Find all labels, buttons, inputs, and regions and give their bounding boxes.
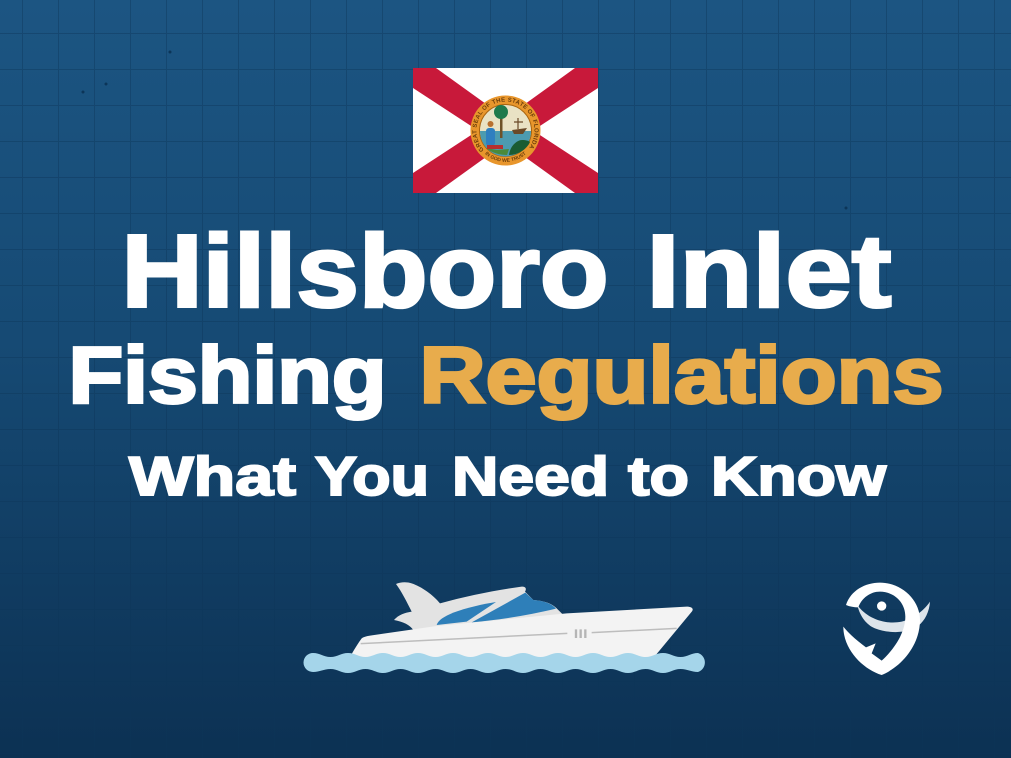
hull stripe [361,628,677,644]
icon: state seal [470,96,540,166]
fish eye [877,601,886,611]
hook outline [843,583,920,675]
title: Hillsboro Inlet [122,214,892,328]
title: Hillsboro Inlet: Hillsboro [122,214,608,328]
heading: Fishing Regulations: Regulations [420,330,944,420]
fish body band [857,602,930,632]
boat windshield [472,593,556,622]
boat cabin and fin [394,582,565,633]
icon: fish logo [843,583,930,675]
icon: Florida flag [413,68,598,193]
boat side window [437,602,496,625]
seal motto: IN GOD WE TRUST [485,152,526,162]
heading: Fishing Regulations [68,330,944,420]
hull vents [576,629,585,638]
boat hull [352,607,693,657]
subtitle: You [315,445,429,507]
waves [304,653,705,673]
seal lettering: GREAT SEAL OF THE STATE OF FLORIDA [472,97,539,152]
icon: boat [304,582,705,673]
subtitle: What [129,445,296,507]
heading: Fishing Regulations: Fishing [68,330,386,420]
subtitle [129,445,886,507]
subtitle: Need [452,445,609,507]
title: Hillsboro Inlet: Inlet [646,214,892,328]
subtitle: Know [711,445,886,507]
subtitle: to [628,445,689,507]
